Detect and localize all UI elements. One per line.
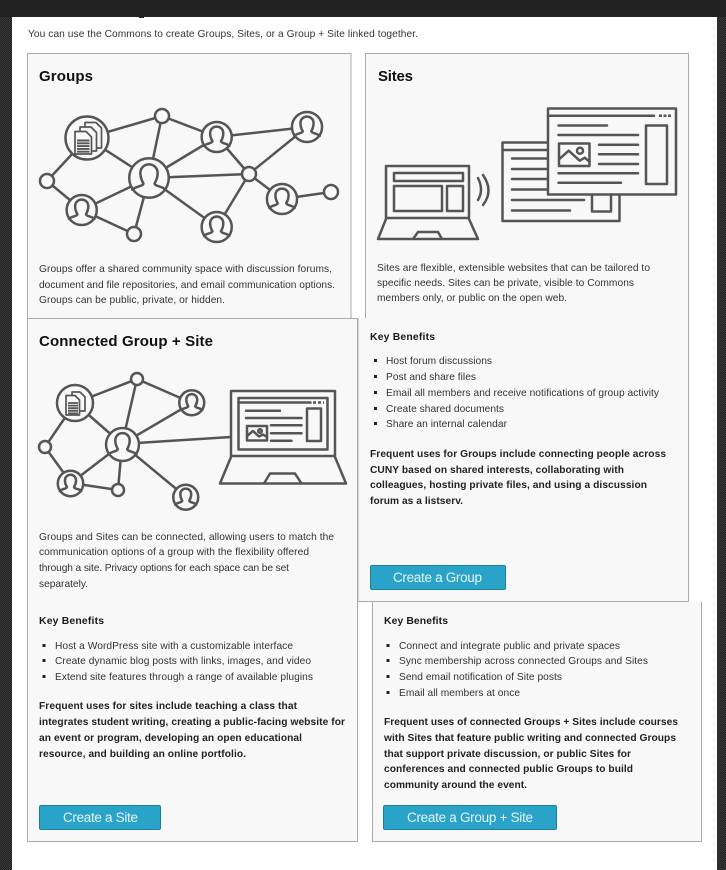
key benefits: connected: Email all members at once (399, 688, 520, 699)
frequent uses: connected: with Sites that feature public writing and connected Groups (383, 733, 676, 744)
panel: sites (358, 54, 688, 602)
button: create a group (370, 566, 506, 590)
heading: connected group + site: Connected Group + Site (39, 333, 213, 350)
key benefits: groups: Email all members and receive notifications of group activity (386, 388, 660, 399)
intro text: You can use the Commons to create Groups, Sites, or a Group + Site linked together. (28, 29, 418, 40)
description: connected: communication options of a group with the flexibility offered (39, 547, 309, 558)
key benefits: groups: Key Benefits (370, 332, 435, 343)
panel: group + site benefits (372, 602, 702, 842)
icon: laptop with website (220, 391, 346, 484)
key benefits: sites: Key Benefits (39, 616, 104, 627)
description: sites: specific needs. Sites can be private, visible to Commons (377, 278, 634, 289)
description: connected: Groups and Sites can be connected, allowing users to match the (39, 532, 334, 543)
description: sites (377, 263, 650, 304)
frequent uses: connected: that support private discussion, or public Sites for (384, 749, 631, 760)
frequent uses: sites (39, 701, 345, 760)
key benefits: connected (384, 616, 648, 699)
illustration: network linked to laptop (39, 373, 346, 510)
frequent uses: groups: CUNY based on shared interests, collaborating with (370, 465, 624, 476)
panel: connected group + site (28, 318, 358, 842)
frequent uses: groups (370, 449, 666, 507)
icon: documents (66, 116, 108, 160)
key benefits: sites (39, 616, 313, 683)
description: groups: document and file repositories, and email communication options. (39, 280, 335, 291)
button: create a group: Create a Group (393, 570, 482, 585)
key benefits: sites: Extend site features through a range of available plugins (55, 672, 313, 683)
key benefits: groups (370, 332, 660, 430)
key benefits: sites: Host a WordPress site with a customizable interface (55, 641, 293, 652)
button: create a site: Create a Site (63, 810, 138, 825)
description: groups (39, 264, 335, 306)
key benefits: groups: Create shared documents (386, 404, 504, 415)
illustration: laptop and websites (378, 108, 676, 239)
key benefits: groups: Host forum discussions (386, 356, 492, 367)
heading: groups: Groups (39, 68, 93, 85)
description: connected: separately. (39, 579, 88, 590)
key benefits: groups: Post and share files (386, 372, 476, 383)
frequent uses: connected: community around the event. (384, 780, 527, 791)
frequent uses: sites: Frequent uses for sites include teaching a class that (39, 701, 298, 712)
panel: groups (28, 54, 351, 318)
frequent uses: groups: forum as a listserv. (370, 496, 463, 507)
frequent uses: sites: integrates student writing, creating a public-facing website for (39, 717, 345, 728)
frequent uses: connected (383, 717, 678, 791)
frequent uses: connected: Frequent uses of connected Groups + Sites include courses (384, 717, 678, 728)
description: sites: Sites are flexible, extensible websites that can be tailored to (377, 263, 650, 274)
description: connected (39, 532, 334, 590)
key benefits: connected: Connect and integrate public and private spaces (399, 641, 620, 652)
icon: document (57, 385, 93, 421)
key benefits: groups: Share an internal calendar (386, 419, 508, 430)
description: sites: members only, or public on the open web. (377, 293, 567, 304)
frequent uses: sites: an event or program, developing an open educational (39, 733, 302, 744)
key benefits: connected: Key Benefits (384, 616, 448, 627)
frequent uses: connected: conferences and connected public Groups to build (384, 764, 633, 775)
frequent uses: sites: resource, and building an online portfolio. (39, 749, 246, 760)
network illustration: groups (40, 109, 338, 242)
button: create a group + site (384, 806, 556, 830)
key benefits: connected: Send email notification of Site posts (399, 672, 562, 683)
description: groups: Groups can be public, private, or hidden. (39, 295, 225, 306)
key benefits: sites: Create dynamic blog posts with links, images, and video (55, 656, 311, 667)
heading: sites: Sites (378, 68, 413, 85)
description: groups: Groups offer a shared community space with discussion forums, (39, 264, 332, 275)
frequent uses: groups: colleagues, hosting private files, and using a discussion (370, 480, 647, 491)
button: create a site (40, 806, 160, 830)
button: create a group + site: Create a Group + Site (407, 810, 533, 825)
frequent uses: groups: Frequent uses for Groups include connecting people across (370, 449, 666, 460)
key benefits: connected: Sync membership across connected Groups and Sites (399, 656, 648, 667)
description: connected: through a site. Privacy options for each space can be set (39, 563, 289, 574)
